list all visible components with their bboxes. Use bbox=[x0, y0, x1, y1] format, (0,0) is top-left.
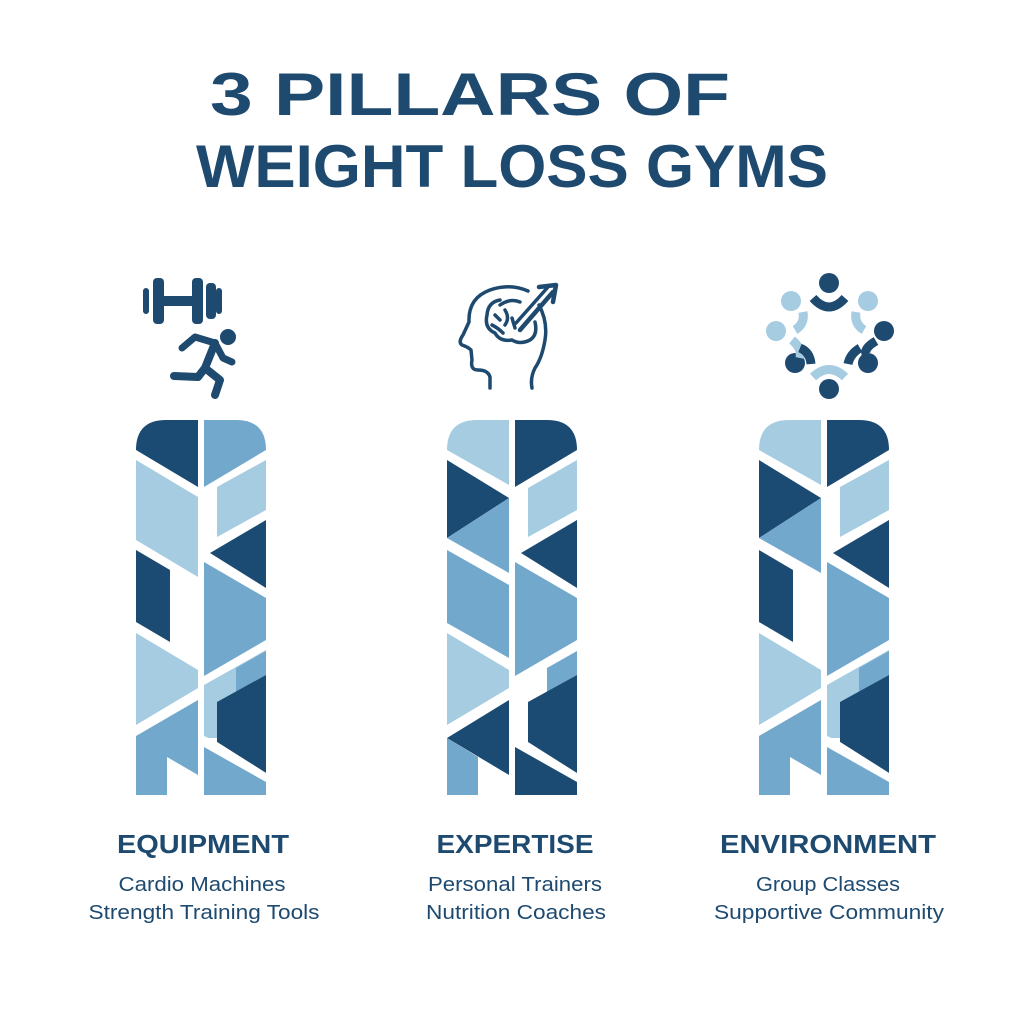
label: environment bbox=[714, 829, 944, 924]
icon: community circle bbox=[766, 273, 894, 399]
label: expertise: Nutrition Coaches bbox=[426, 902, 606, 924]
label: equipment: Strength Training Tools bbox=[88, 902, 320, 924]
icon: head with brain and arrow bbox=[460, 285, 556, 388]
label: expertise bbox=[426, 829, 606, 924]
label: expertise: EXPERTISE bbox=[436, 829, 594, 859]
label: equipment: Cardio Machines bbox=[118, 874, 286, 896]
label: environment: Group Classes bbox=[756, 874, 900, 896]
label: environment: Supportive Community bbox=[714, 902, 944, 924]
pillar: equipment bbox=[136, 420, 266, 795]
icon: dumbbell and runner bbox=[143, 278, 236, 395]
label: equipment bbox=[88, 829, 320, 924]
label: environment: ENVIRONMENT bbox=[720, 829, 936, 859]
pillar: environment bbox=[759, 420, 889, 795]
pillar: expertise bbox=[447, 420, 577, 795]
label: expertise: Personal Trainers bbox=[428, 874, 602, 896]
title: WEIGHT LOSS GYMS bbox=[196, 133, 828, 200]
title: 3 PILLARS OF bbox=[210, 61, 730, 128]
label: equipment: EQUIPMENT bbox=[117, 829, 289, 859]
title bbox=[196, 61, 828, 200]
